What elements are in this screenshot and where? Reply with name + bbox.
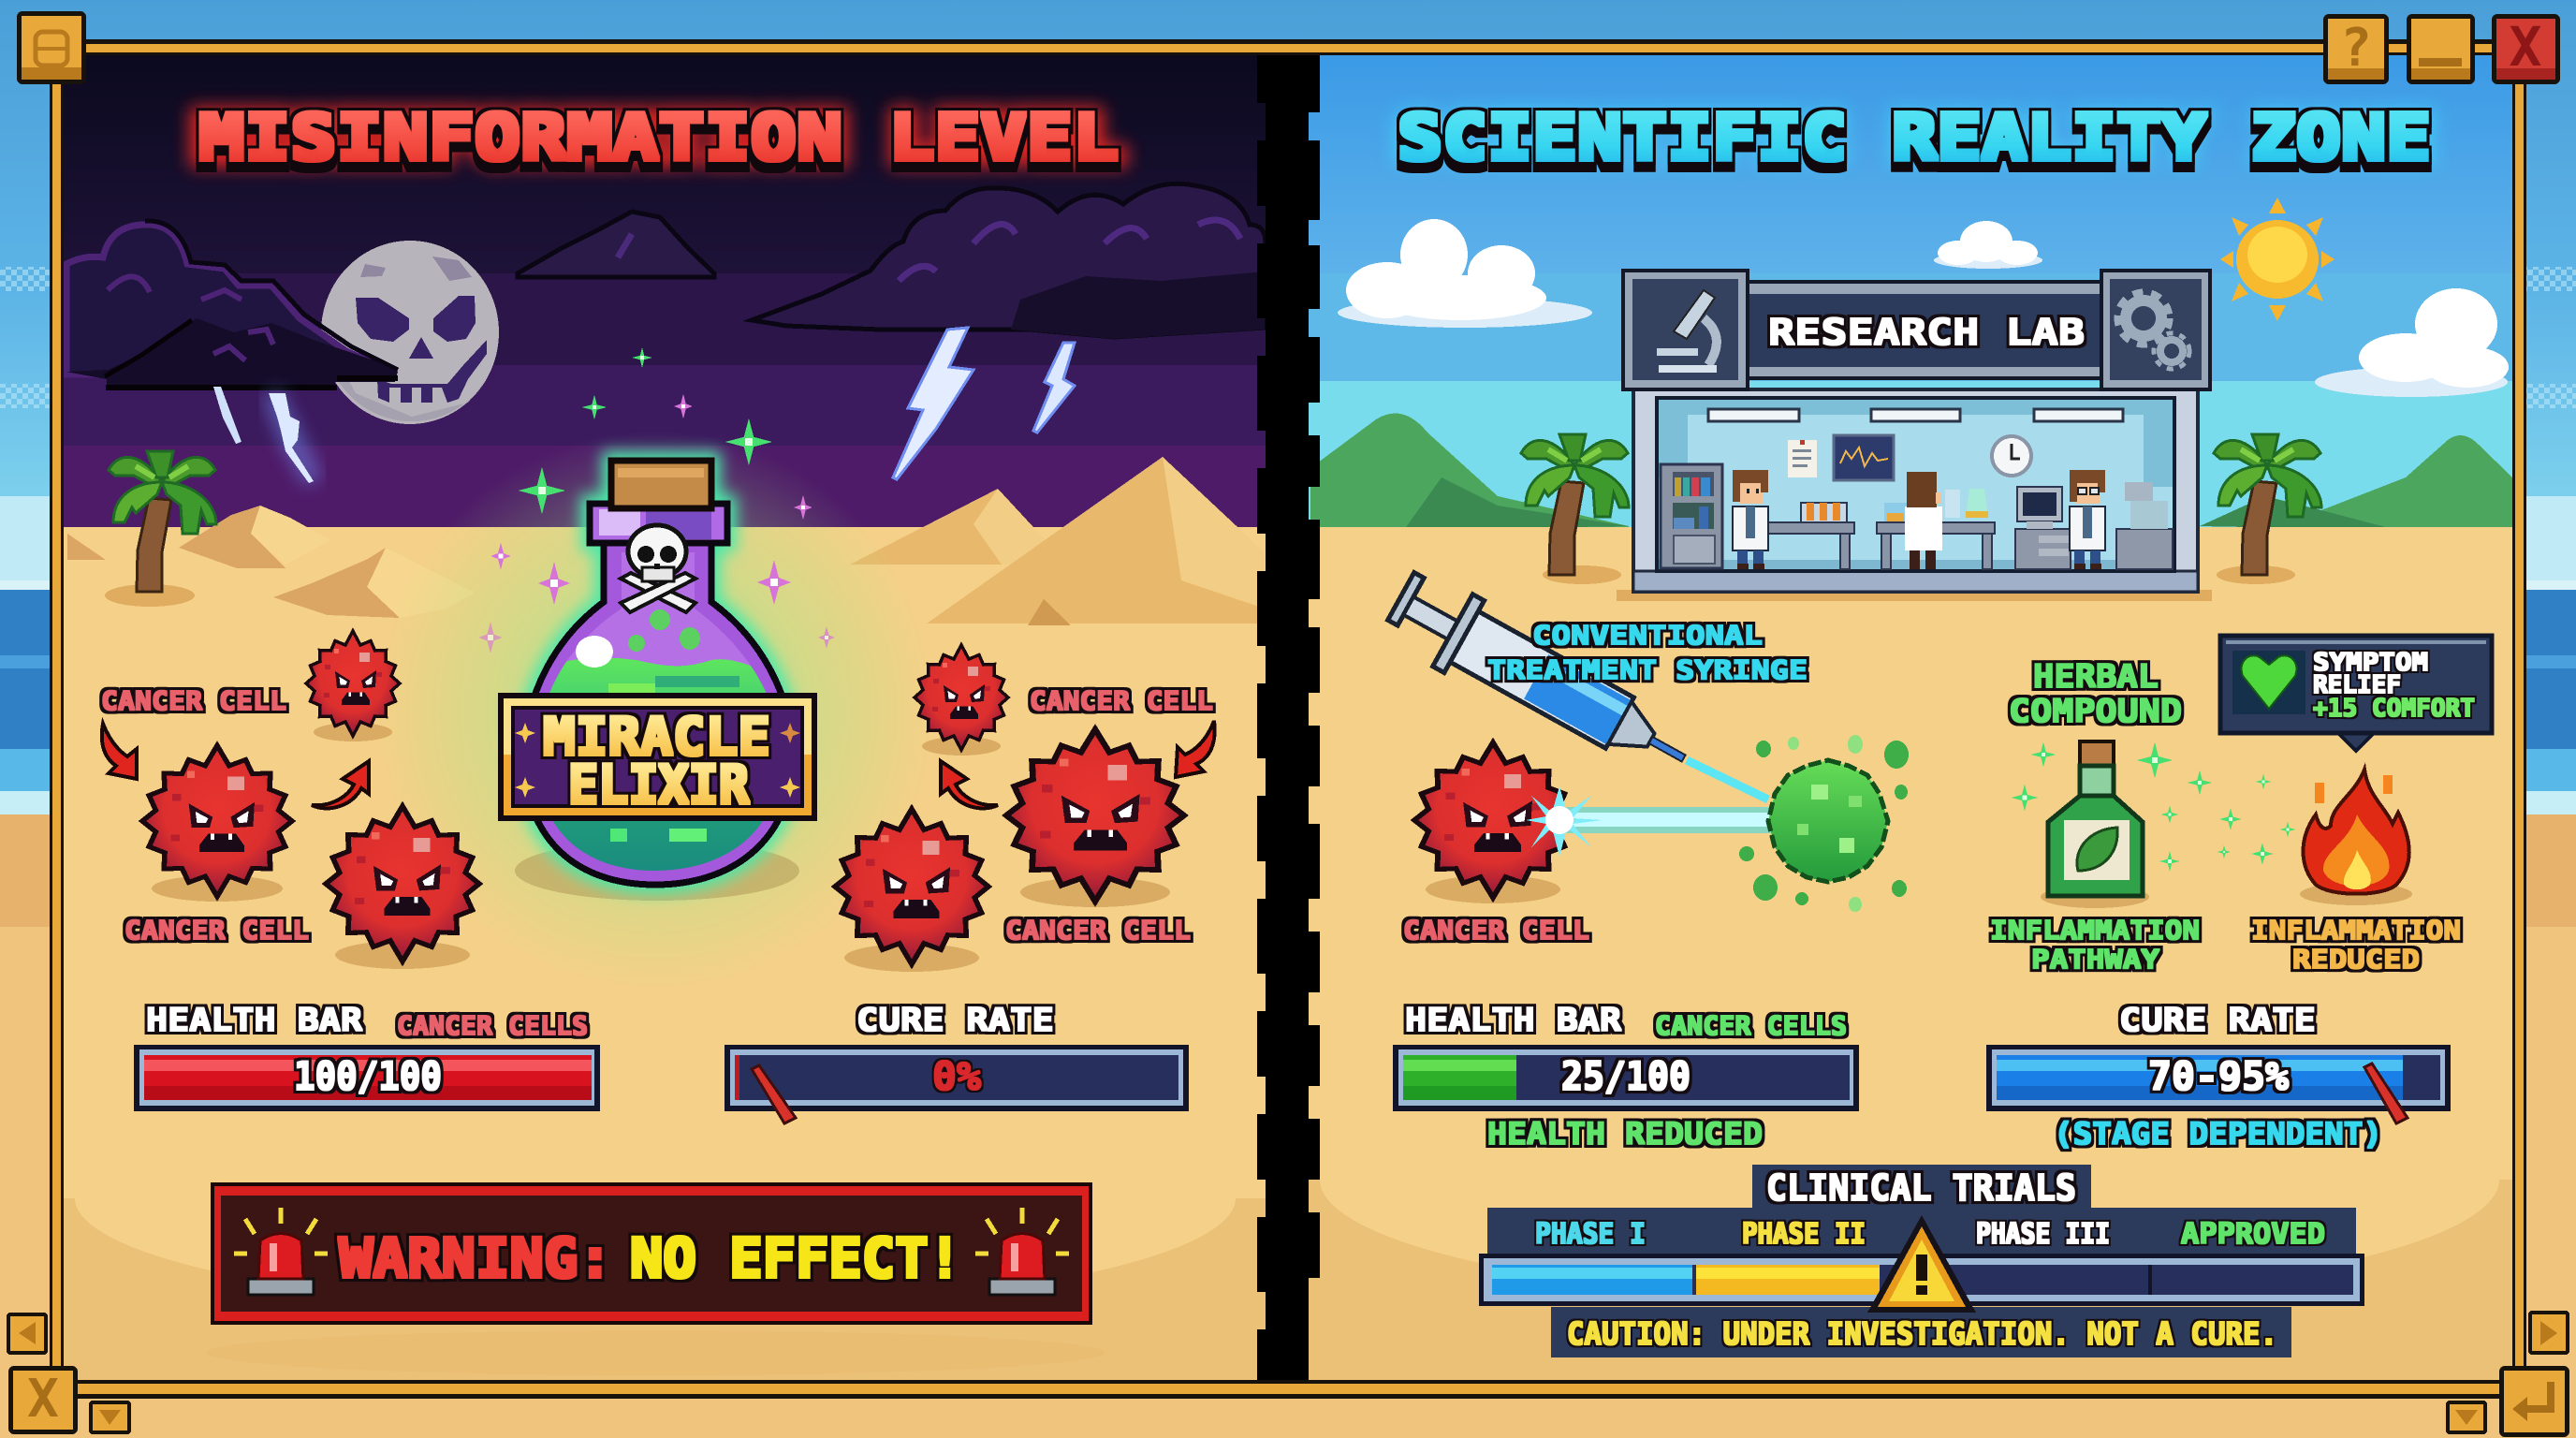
icon: cancer cell hit by beam [1414, 742, 1572, 903]
clinical trials panel: CLINICAL TRIALS [1766, 1167, 2076, 1209]
cure rate bar left [724, 1002, 1189, 1123]
icon: cancer cell large right [1006, 729, 1184, 907]
scientist left [1733, 470, 1768, 569]
daylight sky with colour bands [1306, 55, 2512, 527]
labels: inflammation pathway and reduced: PATHWAY [2031, 944, 2159, 975]
health bar left [134, 1002, 600, 1111]
dunes [67, 457, 1265, 625]
label: conventional treatment syringe: TREATMENT SYRINGE [1487, 654, 1808, 685]
benches and equipment [1767, 482, 2173, 569]
callout: symptom relief: SYMPTOM [2313, 649, 2428, 677]
warning box: NO EFFECT! [630, 1226, 961, 1290]
ceiling lights [1708, 409, 2123, 421]
button: minimize [2407, 14, 2475, 84]
panel: scientific reality zone scene [1306, 55, 2512, 1380]
arrows between cancer cells [102, 721, 1215, 808]
icon: storm clouds left [66, 221, 398, 389]
icon: siren left [234, 1208, 328, 1295]
label: herbal compound: HERBAL [2033, 658, 2159, 696]
label: herbal compound [2009, 658, 2182, 730]
icon: cancer cell lower left [326, 806, 479, 969]
icon: skull and crossbones [621, 525, 695, 612]
labels: cancer cell: CANCER CELL [1030, 685, 1213, 716]
icon: cloud middle [1934, 221, 2042, 269]
icon: microscope panel [1623, 271, 1748, 389]
wall paper, chart and clock [1788, 435, 2031, 480]
sand ground [1306, 527, 2512, 1380]
icon: treatment syringe [1379, 565, 1704, 794]
clinical trials panel: PHASE I [1535, 1218, 1646, 1251]
labels: cancer cell [101, 685, 1213, 946]
cure rate bar left: 0% [932, 1053, 981, 1099]
health bar left: HEALTH BAR [146, 1002, 363, 1039]
health bar left: 100/100 [294, 1053, 442, 1099]
button: cancel bottom left: X [27, 1369, 59, 1430]
icon: green compound orb [1739, 735, 1909, 912]
clinical trials panel: PHASE III [1976, 1218, 2110, 1251]
icon: green heart [2242, 655, 2296, 709]
button: cancel bottom left [8, 1366, 78, 1434]
labels: inflammation pathway and reduced [1990, 915, 2461, 975]
icon: lightning bolts [213, 328, 1075, 483]
cure rate bar left: CURE RATE [856, 1002, 1054, 1039]
label banner: miracle elixir [498, 693, 817, 821]
icon: storm cloud right [752, 183, 1266, 339]
warning box [211, 1182, 1092, 1325]
icon: cancer cell lower right [835, 809, 988, 972]
labels: inflammation pathway and reduced: INFLAMMATION [2251, 915, 2461, 946]
bookshelf [1661, 464, 1722, 568]
labels: inflammation pathway and reduced: INFLAMMATION [1990, 915, 2200, 946]
callout: symptom relief: RELIEF [2313, 671, 2401, 699]
cure rate bar right: CURE RATE [2119, 1002, 2316, 1039]
button: help: ? [2340, 18, 2372, 79]
title: scientific reality zone: SCIENTIFIC REALITY ZONE [1398, 101, 2431, 174]
labels: inflammation pathway and reduced: REDUCED [2292, 944, 2420, 975]
icon: cloud right [2315, 288, 2509, 397]
labels: cancer cell: CANCER CELL [101, 685, 286, 716]
icon: cancer cell large left [142, 745, 292, 902]
health bar right: CANCER CELLS [1655, 1010, 1847, 1041]
icon: cancer cell small top left [306, 631, 400, 741]
button: scroll left [7, 1313, 48, 1355]
label: cancer cell right: CANCER CELL [1403, 915, 1589, 946]
panel: misinformation level scene [64, 55, 1271, 1380]
button: enter bottom right [2499, 1366, 2569, 1437]
button: close: X [2510, 15, 2542, 79]
button: scroll down left [89, 1401, 131, 1434]
cure rate bar right: (STAGE DEPENDENT) [2054, 1116, 2382, 1152]
research lab sign [1623, 271, 2210, 389]
button: help [2323, 14, 2389, 84]
research lab sign: RESEARCH LAB [1768, 312, 2085, 353]
icon: flame [2300, 770, 2412, 905]
icon: siren right [975, 1208, 1069, 1295]
health bar right: HEALTH REDUCED [1487, 1116, 1763, 1152]
icon: sun [2220, 198, 2334, 321]
beams and impact spark [1526, 760, 1773, 857]
warning box: WARNING: [339, 1226, 612, 1290]
label: herbal compound: COMPOUND [2009, 693, 2182, 730]
scientist right [2070, 470, 2105, 569]
health bar right: 25/100 [1561, 1053, 1690, 1099]
health bar right [1393, 1002, 1859, 1152]
health bar left: CANCER CELLS [397, 1010, 588, 1041]
icon: cloud left [1338, 219, 1592, 328]
title: scientific reality zone: SCIENTIFIC REALITY ZONE [1395, 102, 2434, 175]
research lab building [1617, 389, 2212, 601]
label banner: miracle elixir: ELIXIR [568, 755, 750, 816]
sand ground [64, 527, 1271, 1380]
green sparkle particles [2012, 742, 2295, 872]
clinical trials panel: APPROVED [2181, 1218, 2325, 1251]
button: scroll down right [2446, 1401, 2487, 1434]
icon: storm cloud middle [518, 212, 714, 277]
label banner: miracle elixir: MIRACLE [543, 707, 770, 767]
caution strip [1551, 1307, 2291, 1357]
title: misinformation level: MISINFORMATION LEVEL [196, 102, 1121, 175]
label: conventional treatment syringe [1487, 620, 1808, 685]
icon: palm tree right of lab [2214, 434, 2321, 584]
icon: warning triangle [1867, 1215, 1976, 1313]
cure rate bar right [1986, 1002, 2451, 1152]
health bar right: HEALTH BAR [1405, 1002, 1622, 1039]
button: menu top left [17, 11, 86, 84]
labels: cancer cell: CANCER CELL [124, 915, 309, 946]
button: close [2492, 14, 2560, 84]
jagged black divider [1257, 55, 1320, 1380]
icon: herbal bottle [2041, 741, 2149, 908]
icon: palm tree left [105, 451, 216, 607]
cure rate bar right: 70-95% [2148, 1053, 2289, 1099]
icon: skull moon [321, 241, 499, 424]
title: misinformation level: MISINFORMATION LEVEL [198, 101, 1119, 174]
night sky with colour bands [64, 55, 1271, 530]
scientist middle [1905, 472, 1942, 569]
sparkles around flask [478, 347, 835, 653]
icon: mountains [1310, 414, 2512, 530]
callout: symptom relief [2220, 636, 2492, 751]
button: scroll right [2528, 1311, 2569, 1355]
icon: cancer cell small top right [915, 645, 1008, 756]
icon: gears panel [2101, 271, 2210, 389]
clinical trials panel [1479, 1165, 2364, 1357]
icon: miracle elixir flask [404, 437, 906, 962]
clinical trials panel: PHASE II [1742, 1218, 1866, 1251]
icon: palm tree left of lab [1521, 434, 1629, 584]
labels: cancer cell: CANCER CELL [1005, 915, 1191, 946]
callout: symptom relief: +15 COMFORT [2313, 695, 2475, 723]
label: conventional treatment syringe: CONVENTIONAL [1532, 620, 1763, 651]
clinical trials panel: CAUTION: UNDER INVESTIGATION. NOT A CURE. [1567, 1315, 2277, 1352]
